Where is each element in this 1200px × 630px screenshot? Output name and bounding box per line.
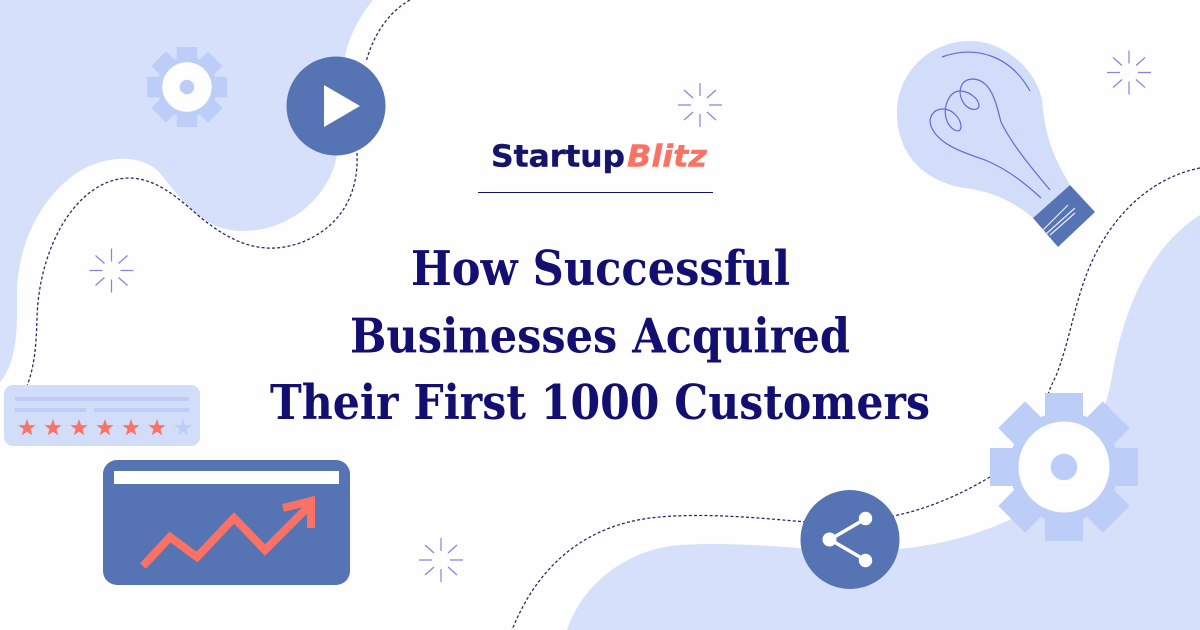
- blob: bottom-right background shape: [567, 215, 1200, 630]
- icon: sparkle left: [90, 248, 134, 292]
- divider under logo: [478, 192, 713, 193]
- icon: light bulb: [897, 41, 1095, 247]
- logo: StartupBlitz: Startup: [491, 140, 625, 174]
- icon: large gear: [990, 393, 1138, 541]
- dashed path: upper-left route: [27, 0, 410, 386]
- icon: share button: [800, 490, 900, 589]
- icon: sparkle near logo: [678, 83, 722, 127]
- title: How Successful: [411, 241, 790, 297]
- icon: rating card: [4, 385, 200, 446]
- dashed path: lower-right route: [512, 168, 1200, 630]
- title: [270, 241, 930, 431]
- bulb base: [1033, 185, 1095, 247]
- logo: StartupBlitz: Blitz: [627, 140, 708, 174]
- bulb filament: [930, 52, 1050, 198]
- trend arrow: [143, 501, 312, 566]
- logo: StartupBlitz: [491, 140, 708, 174]
- title: Their First 1000 Customers: [270, 375, 930, 431]
- icon: small gear top-left: [147, 47, 227, 127]
- blob: top-left background shape: [0, 0, 373, 382]
- rating stars: [18, 419, 192, 435]
- icon: play button: [286, 56, 386, 156]
- icon: sparkle top-right: [1107, 50, 1151, 94]
- bulb glass: [897, 41, 1070, 218]
- chart card: [103, 460, 350, 585]
- base highlights: [1043, 205, 1075, 235]
- icon: sparkle bottom: [419, 538, 463, 582]
- title: Businesses Acquired: [350, 308, 850, 364]
